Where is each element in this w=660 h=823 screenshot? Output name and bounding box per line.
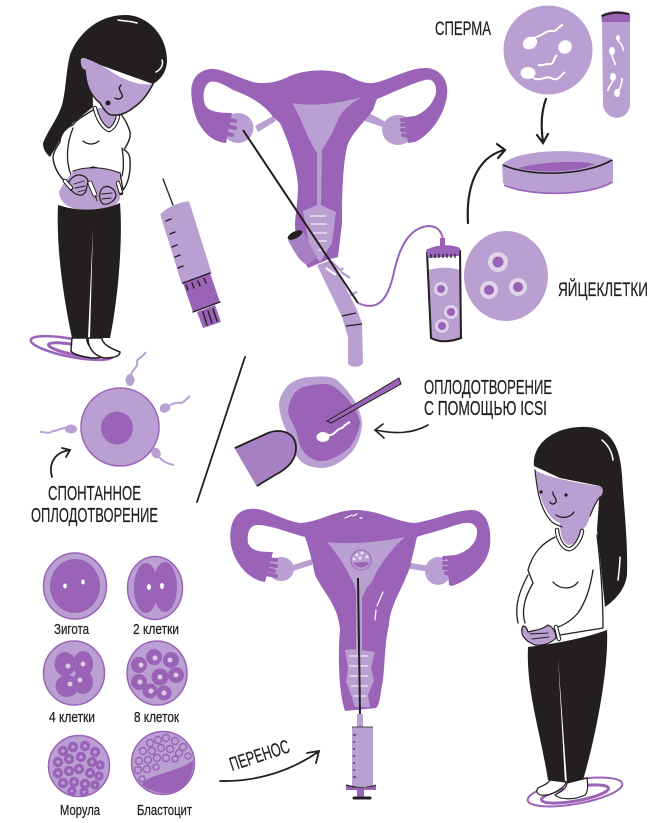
arrow to ICSI egg bbox=[375, 424, 428, 438]
uterus with egg retrieval bbox=[191, 68, 447, 367]
transfer arrow bbox=[220, 751, 319, 781]
label: spontaneous fertilization: ОПЛОДОТВОРЕНИЕ bbox=[31, 505, 158, 527]
stage labels: Морула bbox=[60, 802, 100, 819]
embryo stage: two cells bbox=[128, 556, 182, 620]
uterus with embryo transfer bbox=[230, 509, 490, 711]
label: spontaneous fertilization bbox=[31, 483, 158, 527]
label: transfer: ПЕРЕНОС bbox=[227, 737, 293, 776]
petri dish bbox=[502, 151, 613, 194]
embryo stage: morula bbox=[48, 736, 110, 796]
label: spontaneous fertilization: СПОНТАННОЕ bbox=[48, 483, 141, 505]
embryo stage: eight cells bbox=[127, 641, 187, 705]
label: ICSI fertilization: ОПЛОДОТВОРЕНИЕ bbox=[424, 377, 552, 399]
arrow to egg bbox=[51, 448, 70, 477]
stage labels: 4 клетки bbox=[49, 709, 95, 726]
stage labels: 8 клеток bbox=[134, 709, 179, 726]
arrow: eggs to dish bbox=[468, 144, 505, 223]
stage labels bbox=[49, 621, 192, 819]
catheter bbox=[358, 578, 360, 714]
ICSI egg with pipette bbox=[279, 376, 401, 468]
label: ICSI fertilization bbox=[424, 377, 552, 420]
transfer syringe bbox=[346, 714, 376, 798]
sperm magnified circle bbox=[504, 6, 592, 94]
divider slash bbox=[197, 357, 245, 502]
stage labels: Зигота bbox=[54, 621, 90, 638]
syringe with medication bbox=[162, 179, 221, 328]
pregnant woman bbox=[516, 427, 627, 812]
embryo in uterus bbox=[351, 550, 371, 570]
spontaneous fertilization egg with sperm bbox=[40, 352, 190, 466]
embryo stage: blastocyst bbox=[132, 732, 194, 794]
sperm test tube bbox=[601, 11, 630, 118]
arrow: sperm to dish bbox=[537, 99, 548, 143]
finger outline bbox=[235, 431, 296, 486]
woman injecting herself bbox=[29, 15, 167, 365]
collection tube with eggs bbox=[426, 238, 461, 341]
suction tube bbox=[358, 226, 443, 306]
stage labels: 2 клетки bbox=[133, 621, 179, 638]
label: ICSI fertilization: С ПОМОЩЬЮ ICSI bbox=[424, 398, 547, 420]
embryo stage: zygote bbox=[44, 553, 106, 619]
eggs magnified circle bbox=[464, 231, 548, 321]
finger holding egg bbox=[235, 431, 296, 486]
embryo stage: four cells bbox=[44, 641, 104, 705]
stage labels: Бластоцит bbox=[137, 802, 192, 819]
label: sperm: СПЕРМА bbox=[435, 19, 491, 40]
